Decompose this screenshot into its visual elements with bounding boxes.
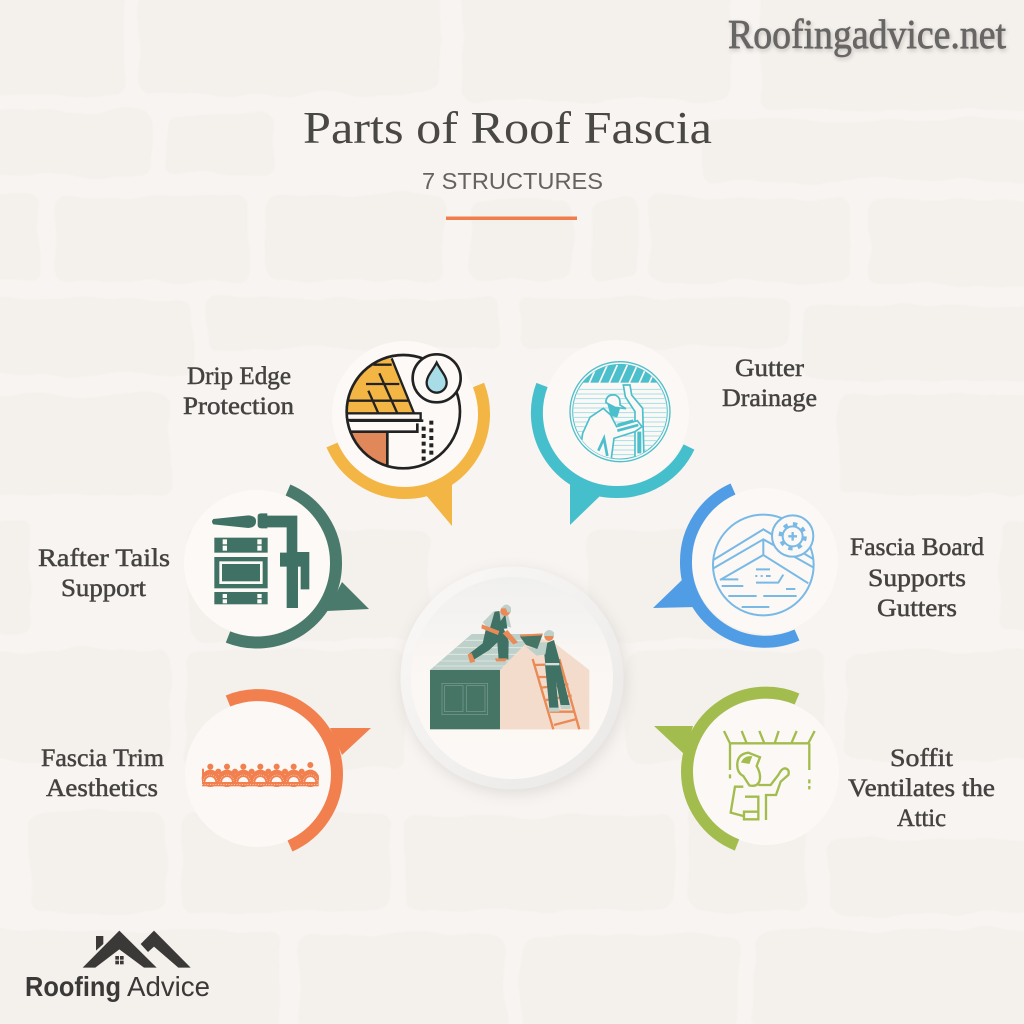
icon: roof gable with gear [713, 515, 815, 615]
icon: roofers on house [430, 604, 589, 729]
subtitle: 7 STRUCTURES [422, 168, 603, 194]
worker on roof [468, 604, 518, 663]
panel: rafter tails support [184, 490, 369, 643]
website name: Roofingadvice.net [728, 11, 1007, 57]
ring and pointer: gutter [537, 385, 689, 525]
logo wordmark: Advice [127, 971, 210, 1002]
panel: drip edge protection [332, 341, 484, 526]
label: fascia board supports gutters [850, 534, 985, 622]
label: gutter drainage: Drainage [722, 385, 817, 412]
icon: worker inspecting soffit [724, 731, 815, 820]
label: fascia trim aesthetics [41, 745, 165, 802]
ring and pointer: soffit [654, 693, 797, 845]
worker on ladder [520, 630, 571, 712]
accent underline [446, 216, 577, 220]
panel: central house illustration [400, 566, 626, 794]
ring and pointer: fascia board [653, 489, 797, 642]
label: drip edge protection: Protection [183, 393, 295, 420]
label: fascia board supports gutters: Fascia Board [850, 534, 985, 561]
label: fascia board supports gutters: Gutters [877, 595, 957, 622]
label: gutter drainage [722, 355, 817, 412]
label: rafter tails support: Support [61, 575, 146, 602]
label: drip edge protection [183, 363, 295, 420]
label: fascia board supports gutters: Supports [868, 565, 966, 592]
panel: fascia board supports gutters [653, 488, 838, 642]
ring and pointer: rafter [228, 490, 369, 643]
label: fascia trim aesthetics: Aesthetics [46, 775, 158, 802]
ring and pointer: fascia trim [228, 695, 371, 846]
label: rafter tails support [38, 545, 170, 602]
panel: fascia trim aesthetics [185, 695, 371, 847]
panel: soffit ventilates the attic [654, 693, 839, 845]
icon: roof edge with water drop [343, 354, 461, 470]
panel: gutter drainage [537, 340, 689, 525]
title: Parts of Roof Fascia [303, 102, 712, 153]
label: rafter tails support: Rafter Tails [38, 545, 170, 572]
label: soffit ventilates the attic: Ventilates the [848, 775, 995, 802]
icon: decorative trim [202, 762, 319, 787]
logo mark: twin roofs [83, 931, 191, 968]
ladder [533, 659, 579, 729]
label: soffit ventilates the attic: Attic [897, 805, 946, 832]
label: drip edge protection: Drip Edge [187, 363, 291, 390]
label: fascia trim aesthetics: Fascia Trim [41, 745, 165, 772]
label: soffit ventilates the attic [848, 745, 995, 832]
ring and pointer: drip edge [332, 385, 484, 526]
logo wordmark: Roofing [25, 971, 121, 1002]
label: gutter drainage: Gutter [735, 355, 805, 382]
label: soffit ventilates the attic: Soffit [890, 745, 953, 772]
logo: Roofing Advice [25, 931, 210, 1002]
icon: worker fixing downspout [570, 362, 670, 463]
icon: rafter tail assembly [212, 513, 309, 608]
